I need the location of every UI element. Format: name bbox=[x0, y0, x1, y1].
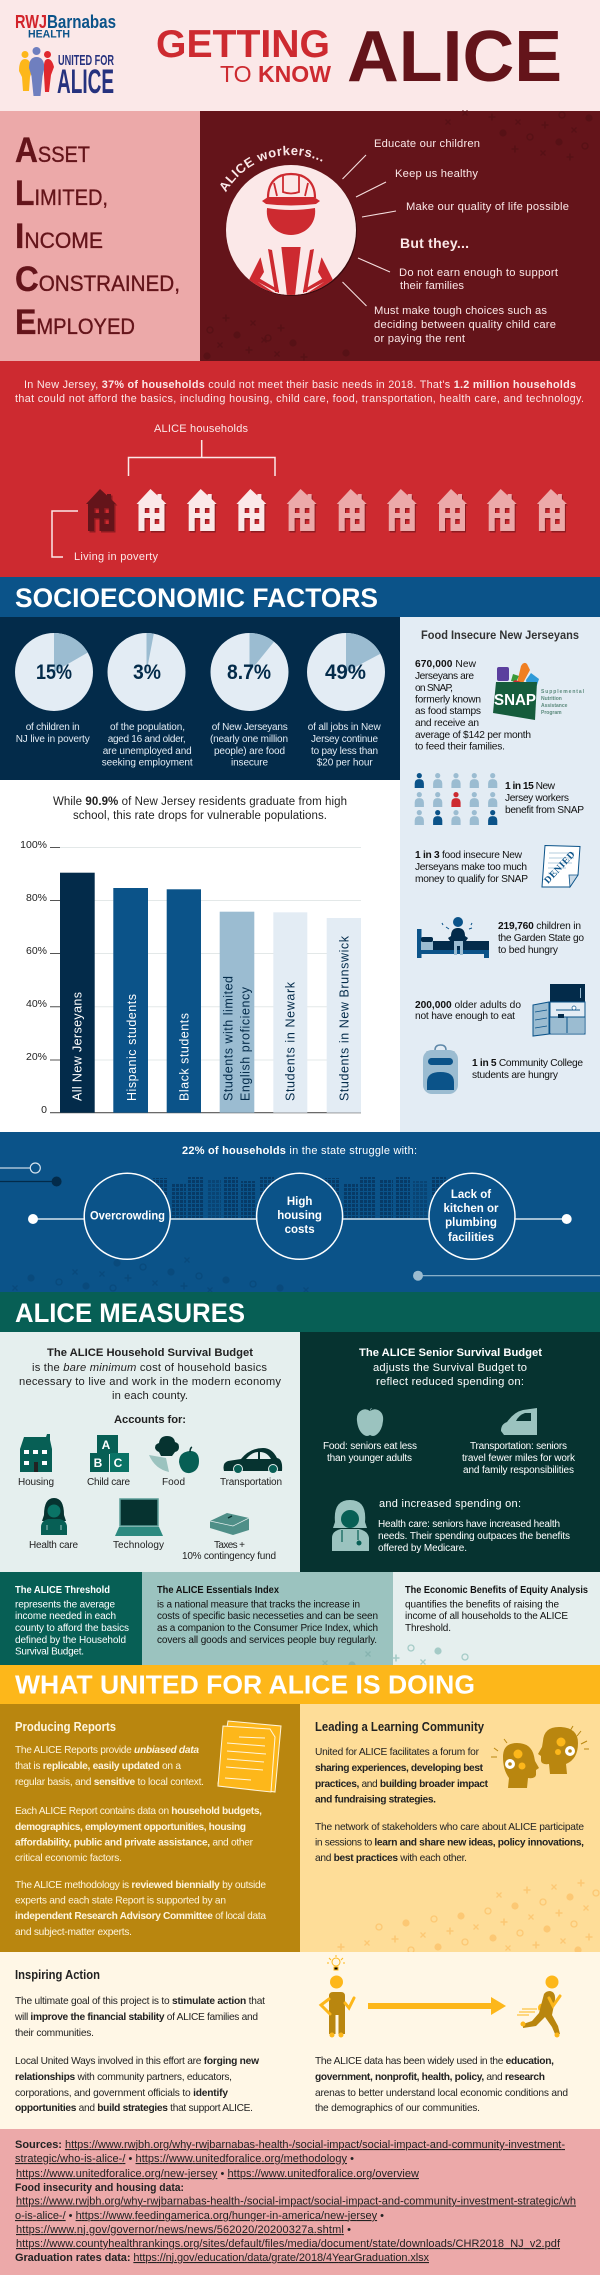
text: 1 in 5: students are hungry bbox=[472, 1070, 559, 1081]
chart title bbox=[53, 796, 347, 822]
panel: sources: Sources: https://www.rwjbh.org/why-rwjbarnabas-health-/social-impact/social-impact-and-community-investment- bbox=[15, 2139, 565, 2151]
pie captions: to pay less than bbox=[311, 746, 378, 757]
text: food seniors: Food: seniors eat less bbox=[323, 1441, 417, 1452]
heading: leading a learning community: Leading a Learning Community bbox=[315, 1720, 484, 1734]
circle: high housing costs: housing bbox=[277, 1210, 322, 1222]
circle: overcrowding: Overcrowding bbox=[90, 1210, 165, 1222]
pie captions: of children in bbox=[26, 722, 80, 733]
panel: graduation chart bbox=[0, 780, 400, 1132]
pie captions bbox=[16, 722, 381, 768]
panel: pie stats bbox=[0, 617, 400, 780]
worker text list bbox=[374, 138, 569, 345]
icon: child care blocks bbox=[90, 1435, 129, 1472]
icon: child on bed bbox=[417, 917, 489, 958]
pie: 8.7%: 8.7% bbox=[227, 661, 271, 684]
text: 1 in 15: 1 in 15 New bbox=[505, 781, 556, 792]
icon: child care blocks: A bbox=[102, 1438, 111, 1452]
panel heading: Food Insecure New Jerseyans bbox=[421, 628, 579, 642]
icon: running person bbox=[517, 1976, 560, 2038]
pie: 15%: 15% bbox=[36, 661, 72, 684]
panel: household survival budget bbox=[0, 1332, 300, 1572]
icon: SNAP logo: Program bbox=[541, 710, 562, 716]
logo: United for ALICE bbox=[19, 47, 114, 101]
worker text list: their families bbox=[400, 280, 464, 292]
panel: ALICE essentials index: is a national measure that tracks the increase in bbox=[157, 1600, 360, 1610]
logo: RWJBarnabas Health: RWJ bbox=[15, 12, 47, 32]
panel: economic benefits of equity analysis: income of all households to the ALICE bbox=[405, 1611, 568, 1622]
panel: sources: https://www.nj.gov/governor/news/news/562020/20200327a.shtml • bbox=[16, 2224, 351, 2236]
icon: health care worker bbox=[41, 1498, 67, 1535]
panel: sources: https://www.countyhealthrankings.org/sites/default/files/media/document/state/downloads/CHR2018_NJ_v2.pdf bbox=[16, 2238, 561, 2250]
arrow bbox=[368, 1997, 506, 2015]
text: forum bbox=[315, 1747, 489, 1806]
pie captions: of the population, bbox=[110, 722, 185, 733]
text: 1 in 3: Jerseyans make too much bbox=[415, 862, 527, 873]
text: network: The network of stakeholders who care about ALICE participate bbox=[315, 1822, 584, 1833]
budget description: necessary to live and work in the modern economy bbox=[19, 1376, 281, 1388]
budget description: The ALICE Household Survival Budget bbox=[47, 1347, 253, 1359]
icon: SNAP logo: Supplemental bbox=[541, 689, 585, 695]
heading: what United for ALICE is doing bbox=[0, 1665, 600, 1704]
text: methodology: independent Research Advisory Committee of local data bbox=[15, 1911, 266, 1922]
pie captions: are unemployed and bbox=[103, 746, 192, 757]
panel: producing reports bbox=[0, 1704, 300, 1952]
bar chart: Black students bbox=[178, 1013, 192, 1101]
panel: ALICE workers bbox=[200, 110, 600, 361]
icon: housing bbox=[20, 1434, 52, 1472]
connector line and dots bbox=[0, 1163, 600, 1281]
text: data usage: The ALICE data has been widely used in the education, bbox=[315, 2056, 554, 2067]
text: ultimate goal: their communities. bbox=[15, 2028, 94, 2039]
circle: high housing costs: costs bbox=[285, 1224, 315, 1236]
panel: ALICE acronym: INCOME bbox=[15, 217, 103, 256]
icon: car side bbox=[501, 1408, 537, 1435]
panel: ALICE essentials index: costs of specific basic necesseties and can be seen bbox=[157, 1611, 378, 1622]
header panel bbox=[0, 0, 600, 111]
bar chart: All New Jerseyans bbox=[70, 992, 84, 1101]
text: 670,000 on SNAP: 670,000 New bbox=[415, 659, 477, 670]
icon: denied paper: DENIED bbox=[543, 850, 578, 886]
text: report contents: critical economic factors. bbox=[15, 1853, 122, 1864]
logo: RWJBarnabas Health bbox=[15, 12, 116, 40]
icon: laptop bbox=[115, 1499, 163, 1536]
panel: economic benefits of equity analysis: quantifies the benefits of raising the bbox=[405, 1600, 559, 1610]
text: health care seniors: Health care: seniors have increased health bbox=[378, 1519, 560, 1530]
heading: what United for ALICE is doing: WHAT UNITED FOR ALICE IS DOING bbox=[15, 1670, 475, 1700]
icon: construction worker bbox=[226, 165, 357, 300]
icon: apple bbox=[357, 1408, 383, 1436]
text: report contents: Each ALICE Report contains data on household budgets, bbox=[15, 1806, 262, 1817]
heading: socioeconomic factors: SOCIOECONOMIC FACTORS bbox=[15, 583, 378, 613]
pie: 15% bbox=[15, 633, 93, 711]
panel: economic benefits of equity analysis: The Economic Benefits of Equity Analysis bbox=[405, 1585, 588, 1596]
panel: ALICE threshold: defined by the Household bbox=[15, 1635, 126, 1646]
icon: senior health care worker bbox=[332, 1500, 369, 1551]
text: 670,000 on SNAP: on SNAP, bbox=[415, 683, 453, 694]
bar chart: 80% bbox=[26, 892, 47, 904]
circle: high housing costs bbox=[257, 1173, 343, 1259]
circle: high housing costs: High bbox=[287, 1196, 312, 1208]
budget description: Accounts for: bbox=[114, 1414, 186, 1426]
text: ultimate goal: will improve the financial stability of ALICE families and bbox=[14, 2012, 258, 2023]
text: 670,000 on SNAP: as food stamps bbox=[415, 706, 481, 717]
text: forum: and fundraising strategies. bbox=[315, 1794, 436, 1806]
panel: ALICE acronym: LIMITED, bbox=[15, 174, 108, 213]
text: 1 in 3 bbox=[415, 850, 528, 885]
circle: overcrowding bbox=[84, 1173, 170, 1259]
budget description: is the bare minimum cost of household basics bbox=[32, 1362, 267, 1374]
pie: 49%: 49% bbox=[325, 661, 366, 684]
logo: United for ALICE: UNITED FOR bbox=[58, 52, 114, 69]
circle: lack of kitchen or plumbing: facilities bbox=[448, 1232, 494, 1244]
panel: households bbox=[0, 361, 600, 577]
text: local united ways: opportunities and build strategies that support ALICE. bbox=[15, 2103, 253, 2114]
text: transportation seniors bbox=[462, 1441, 576, 1476]
panel: sources: Graduation rates data: https://nj.gov/education/data/grate/2018/4YearGraduation.xlsx bbox=[15, 2252, 430, 2264]
text: network: in sessions to learn and share new ideas, policy innovations, bbox=[315, 1838, 584, 1848]
panel: ALICE acronym: ASSET bbox=[15, 131, 90, 170]
pie captions: Jersey continue bbox=[311, 734, 378, 745]
label: child care: Child care bbox=[87, 1477, 130, 1488]
pie: 3% bbox=[108, 633, 186, 711]
text: data usage bbox=[315, 2056, 568, 2114]
text: 219,760 children: to bed hungry bbox=[498, 945, 559, 956]
pie: 49% bbox=[307, 633, 385, 711]
text: 1 in 5: 1 in 5 Community College bbox=[472, 1058, 583, 1069]
text: forum: United for ALICE facilitates a forum for bbox=[315, 1747, 480, 1758]
icon: backpack bbox=[423, 1045, 458, 1094]
panel: sources: https://www.unitedforalice.org/new-jersey • https://www.unitedforalice.org/overview bbox=[16, 2168, 419, 2180]
text: 670,000 on SNAP bbox=[415, 659, 531, 752]
panel: leading a learning community bbox=[300, 1704, 600, 1954]
icon: tax box bbox=[210, 1513, 249, 1535]
worker text list: deciding between quality child care bbox=[374, 319, 556, 331]
bar chart: 0 bbox=[41, 1104, 47, 1116]
panel: sources: o-is-alice-/ • https://www.feedingamerica.org/hunger-in-america/new-jersey • bbox=[15, 2210, 384, 2222]
text: 1 in 15: Jersey workers bbox=[505, 793, 569, 804]
text: forum: practices, and building broader impact bbox=[315, 1779, 489, 1790]
pie: 8.7% bbox=[210, 633, 288, 711]
intro text bbox=[15, 379, 584, 405]
bar chart: Students in New Brunswick bbox=[338, 935, 352, 1101]
label: taxes and contingency fund: 10% contingency fund bbox=[182, 1551, 276, 1562]
panel: ALICE essentials index bbox=[142, 1572, 393, 1669]
heading: ALICE measures: ALICE MEASURES bbox=[15, 1298, 245, 1328]
icon: child care blocks: C bbox=[114, 1456, 123, 1470]
panel: sources: https://www.rwjbh.org/why-rwjbarnabas-health-/social-impact/social-impact-and-community-investment-strategic/wh bbox=[16, 2196, 576, 2208]
icon row: ten houses bbox=[86, 489, 568, 532]
text: transportation seniors: Transportation: seniors bbox=[470, 1441, 567, 1452]
text: local united ways: Local United Ways involved in this effort are forging new bbox=[15, 2056, 259, 2067]
logo: RWJBarnabas Health: Barnabas bbox=[47, 12, 116, 32]
panel: sources: strategic/who-is-alice-/ • https://www.unitedforalice.org/methodology • bbox=[15, 2153, 354, 2165]
text: 670,000 on SNAP: average of $142 per month bbox=[415, 730, 531, 741]
text: data usage: the demographics of our communities. bbox=[315, 2103, 480, 2114]
heading: ALICE measures bbox=[0, 1292, 600, 1332]
intro text: that could not afford the basics, including housing, child care, food, transportation, health care, and technology. bbox=[15, 393, 584, 405]
bar chart: Students with limited bbox=[222, 976, 236, 1101]
budget description bbox=[19, 1347, 281, 1426]
label: ALICE households bbox=[128, 423, 275, 476]
budget description: in each county. bbox=[112, 1390, 188, 1402]
senior budget description: adjusts the Survival Budget to bbox=[373, 1362, 527, 1374]
heading: socioeconomic factors bbox=[0, 577, 600, 617]
text: 219,760 children: 219,760 children in bbox=[498, 921, 581, 932]
panel: ALICE acronym: EMPLOYED bbox=[15, 303, 135, 342]
pie captions: seeking employment bbox=[102, 758, 193, 768]
pie captions: (nearly one million bbox=[210, 734, 288, 745]
text: reports intro: that is replicable, easily updated on a bbox=[15, 1761, 181, 1772]
icon: SNAP logo: Nutrition bbox=[541, 696, 562, 702]
text: report contents: affordability, public and private assistance, and other bbox=[15, 1838, 254, 1848]
panel: ALICE essentials index: as a companion to the Consumer Price Index, which bbox=[157, 1623, 378, 1634]
title: ALICE bbox=[347, 17, 562, 97]
text: 1 in 3: money to qualify for SNAP bbox=[415, 874, 528, 885]
title bbox=[156, 17, 562, 97]
text: health care seniors: needs. Their spending outpaces the benefits bbox=[378, 1531, 570, 1542]
icon: two heads with gears bbox=[491, 1726, 589, 1788]
logo: United for ALICE: ALICE bbox=[57, 63, 114, 101]
worker text list: Educate our children bbox=[374, 138, 480, 150]
curved label: ALICE workers: ALICE workers... bbox=[220, 146, 322, 192]
panel: ALICE threshold: income needed in each bbox=[15, 1611, 116, 1622]
text: health care seniors: offered by Medicare. bbox=[378, 1543, 467, 1554]
panel: ALICE threshold: The ALICE Threshold bbox=[15, 1585, 110, 1596]
text: data usage: arenas to better understand local economic conditions and bbox=[315, 2088, 568, 2099]
icon: person with lightbulb bbox=[321, 1955, 354, 2038]
chart title: While 90.9% of New Jersey residents graduate from high bbox=[53, 796, 347, 808]
icon: SNAP logo: Assistance bbox=[541, 703, 568, 709]
panel: ALICE essentials index: The ALICE Essentials Index bbox=[157, 1585, 279, 1596]
pie captions: NJ live in poverty bbox=[16, 734, 90, 745]
worker text list: or paying the rent bbox=[374, 333, 466, 345]
panel: economic benefits of equity analysis: Threshold. bbox=[405, 1623, 451, 1634]
text: local united ways: relationships with community partners, educators, bbox=[15, 2072, 232, 2083]
pie captions: insecure bbox=[231, 758, 268, 768]
logo: RWJBarnabas Health: HEALTH bbox=[28, 28, 70, 40]
worker text list: But they... bbox=[400, 235, 469, 251]
text: forum: sharing experiences, developing best bbox=[315, 1763, 484, 1774]
pie captions: people) are food bbox=[214, 746, 285, 757]
intro text: In New Jersey, 37% of households could not meet their basic needs in 2018. That's 1.2 million households bbox=[24, 379, 576, 391]
label: technology: Technology bbox=[113, 1540, 164, 1551]
bar chart: 20% bbox=[26, 1051, 47, 1063]
text: 200,000 older adults: not have enough to eat bbox=[415, 1011, 515, 1022]
panel: housing struggles bbox=[0, 1132, 600, 1292]
text: 219,760 children: the Garden State go bbox=[498, 933, 584, 944]
text: 22% of households: 22% of households in the state struggle with: bbox=[182, 1145, 417, 1157]
text: methodology bbox=[15, 1880, 266, 1938]
text: 200,000 older adults: 200,000 older adults do bbox=[415, 1000, 521, 1011]
panel: economic benefits of equity analysis bbox=[392, 1572, 600, 1665]
title: GETTING bbox=[156, 23, 330, 66]
senior budget description bbox=[359, 1347, 542, 1388]
bar chart: Hispanic students bbox=[125, 994, 139, 1101]
text: transportation seniors: travel fewer miles for work bbox=[462, 1453, 576, 1464]
pie: 3%: 3% bbox=[133, 661, 161, 684]
worker text list: Keep us healthy bbox=[395, 168, 478, 180]
label: taxes and contingency fund bbox=[182, 1540, 276, 1562]
text: 200,000 older adults bbox=[415, 1000, 521, 1022]
label: housing: Housing bbox=[18, 1477, 54, 1488]
bar chart bbox=[20, 839, 361, 1116]
panel: sources bbox=[0, 2129, 600, 2275]
bar chart: 60% bbox=[26, 945, 47, 957]
label: transportation: Transportation bbox=[220, 1477, 282, 1488]
panel: ALICE threshold: represents the average bbox=[15, 1600, 115, 1610]
label: health care: Health care bbox=[29, 1540, 78, 1551]
circle: lack of kitchen or plumbing: plumbing bbox=[445, 1217, 497, 1229]
icon: open refrigerator bbox=[533, 984, 585, 1036]
circle: lack of kitchen or plumbing bbox=[429, 1173, 515, 1259]
text: local united ways: corporations, and government officials to identify bbox=[15, 2088, 228, 2099]
title: TO KNOW bbox=[220, 61, 331, 87]
panel: inspiring action bbox=[0, 1952, 600, 2129]
text: increased spending: and increased spending on: bbox=[379, 1498, 521, 1510]
circle: lack of kitchen or plumbing: Lack of bbox=[451, 1189, 491, 1201]
text: food seniors: than younger adults bbox=[327, 1453, 412, 1464]
text: 1 in 15: benefit from SNAP bbox=[505, 805, 584, 816]
text: ultimate goal: The ultimate goal of this project is to stimulate action that bbox=[15, 1996, 265, 2007]
text: network bbox=[315, 1822, 584, 1864]
text: 1 in 3: 1 in 3 food insecure New bbox=[415, 850, 523, 861]
panel: senior survival budget bbox=[300, 1332, 600, 1572]
text: 1 in 15 bbox=[505, 781, 584, 816]
text: ultimate goal bbox=[14, 1996, 265, 2039]
circle: lack of kitchen or plumbing: kitchen or bbox=[444, 1203, 499, 1215]
pie captions: aged 16 and older, bbox=[108, 734, 186, 745]
panel: sources: Food insecurity and housing data: bbox=[15, 2182, 184, 2194]
callout lines bbox=[342, 155, 396, 306]
text: food seniors bbox=[323, 1441, 417, 1464]
text: transportation seniors: and family responsibilities bbox=[463, 1465, 574, 1476]
panel: ALICE threshold: Survival Budget. bbox=[15, 1646, 84, 1658]
text: 670,000 on SNAP: and receive an bbox=[415, 718, 479, 729]
senior budget description: The ALICE Senior Survival Budget bbox=[359, 1347, 542, 1359]
text: reports intro: The ALICE Reports provide unbiased data bbox=[15, 1745, 199, 1756]
panel: ALICE acronym: CONSTRAINED, bbox=[15, 260, 180, 299]
text: reports intro: regular basis, and sensitive to local context. bbox=[15, 1777, 204, 1788]
bar chart: English proficiency bbox=[239, 986, 253, 1101]
chart title: school, this rate drops for vulnerable populations. bbox=[73, 810, 327, 822]
text: data usage: government, nonprofit, health, policy, and research bbox=[315, 2072, 545, 2083]
bar chart: Students in Newark bbox=[284, 981, 298, 1101]
icon: SNAP logo bbox=[493, 663, 585, 720]
text: reports intro bbox=[15, 1745, 204, 1788]
icon: child care blocks: B bbox=[94, 1456, 103, 1470]
label: taxes and contingency fund: Taxes + bbox=[214, 1540, 245, 1551]
icon: document stack bbox=[218, 1721, 281, 1792]
text: health care seniors bbox=[378, 1519, 570, 1554]
panel: ALICE threshold: county to afford the basics bbox=[15, 1623, 129, 1634]
text: network: and best practices with each other. bbox=[315, 1853, 467, 1864]
text: 1 in 5 bbox=[472, 1058, 583, 1081]
text: 670,000 on SNAP: to feed their families. bbox=[415, 742, 505, 752]
heading: producing reports: Producing Reports bbox=[15, 1720, 116, 1734]
text: 670,000 on SNAP: Jerseyans are bbox=[415, 671, 474, 682]
worker text list: Do not earn enough to support bbox=[399, 267, 559, 279]
text: 219,760 children bbox=[498, 921, 584, 956]
label: food: Food bbox=[162, 1477, 185, 1488]
panel: ALICE acronym bbox=[0, 111, 200, 361]
text: report contents: demographics, employment opportunities, housing bbox=[15, 1822, 246, 1833]
panel: ALICE essentials index: covers all goods and services people buy regularly. bbox=[157, 1635, 377, 1646]
panel: ALICE threshold bbox=[0, 1572, 142, 1665]
text: report contents bbox=[15, 1806, 262, 1864]
worker text list: Make our quality of life possible bbox=[406, 201, 569, 213]
panel: food insecure New Jerseyans bbox=[400, 617, 600, 1132]
label: ALICE households: ALICE households bbox=[154, 423, 248, 435]
pie captions: of New Jerseyans bbox=[212, 722, 288, 733]
text: 670,000 on SNAP: formerly known bbox=[415, 694, 481, 706]
icon: car bbox=[224, 1448, 282, 1474]
text: methodology: experts and each state Report is supported by an bbox=[15, 1896, 226, 1906]
text: methodology: and subject-matter experts. bbox=[15, 1927, 132, 1938]
pie captions: of all jobs in New bbox=[308, 722, 381, 733]
heading: inspiring action: Inspiring Action bbox=[15, 1968, 100, 1982]
icon: food bbox=[149, 1436, 199, 1473]
text: methodology: The ALICE methodology is reviewed biennially by outside bbox=[15, 1880, 266, 1891]
icon grid: 1 in 15 workers bbox=[415, 773, 497, 825]
icon: SNAP logo: SNAP bbox=[494, 692, 536, 709]
skyline bbox=[153, 1177, 446, 1218]
label: living in poverty: Living in poverty bbox=[74, 551, 158, 563]
label: living in poverty bbox=[52, 511, 158, 563]
bar chart: 100% bbox=[20, 839, 47, 851]
text: local united ways bbox=[15, 2056, 259, 2114]
pie captions: $20 per hour bbox=[317, 758, 373, 768]
bar chart: 40% bbox=[26, 998, 47, 1010]
senior budget description: reflect reduced spending on: bbox=[376, 1376, 524, 1388]
worker text list: Must make tough choices such as bbox=[374, 305, 547, 317]
